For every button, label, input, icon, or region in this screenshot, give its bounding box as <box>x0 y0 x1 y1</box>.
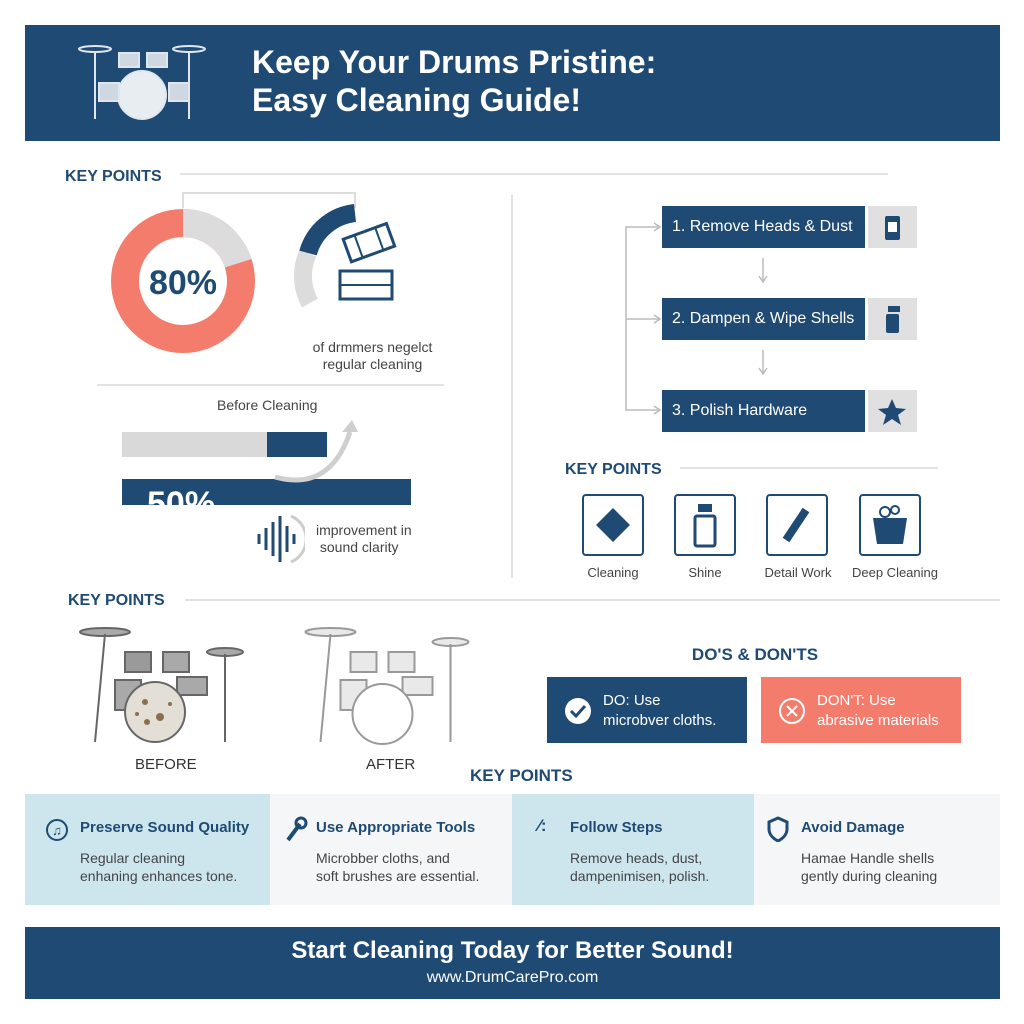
card: follow steps <box>512 794 754 905</box>
chart: donut 80% <box>111 209 255 353</box>
footer banner: www.DrumCarePro.com <box>427 969 598 986</box>
footer banner <box>25 927 1000 999</box>
chart: donut 80%: 80% <box>149 264 217 302</box>
callout: do: DO: Use <box>603 692 661 709</box>
card: follow steps: dampenimisen, polish. <box>570 868 709 884</box>
card: follow steps: ⁄: <box>538 816 546 835</box>
card: avoid damage: Avoid Damage <box>801 819 905 836</box>
chart: before/after bars: Before Cleaning <box>217 397 317 413</box>
card: tools: soft brushes are essential. <box>316 868 479 884</box>
callout: do <box>547 677 747 743</box>
step 1: 1. Remove Heads & Dust <box>672 218 853 235</box>
heading: key points 1: KEY POINTS <box>65 168 162 185</box>
text: improvement: sound clarity <box>320 539 398 555</box>
text: Detail Work <box>765 565 831 580</box>
card: avoid damage <box>754 794 1000 905</box>
card: tools <box>270 794 512 905</box>
text: improvement: improvement in <box>316 522 412 538</box>
step 1 <box>662 206 865 248</box>
text: Shine <box>688 565 722 580</box>
icon: cleaning <box>582 494 644 556</box>
title: Easy Cleaning Guide! <box>252 82 581 118</box>
footer banner: Start Cleaning Today for Better Sound! <box>291 937 734 964</box>
text: drummers neglect: of drmmers negelct <box>313 339 432 355</box>
icon: deep cleaning <box>859 494 921 556</box>
step 2 <box>662 298 865 340</box>
icon: shine <box>674 494 736 556</box>
card: avoid damage: gently during cleaning <box>801 868 937 884</box>
image: drum kit before <box>79 627 244 743</box>
card: preserve sound: Preserve Sound Quality <box>80 819 249 836</box>
heading: key points 4: KEY POINTS <box>470 766 573 785</box>
text: drummers neglect: regular cleaning <box>323 356 422 372</box>
card: follow steps: Follow Steps <box>570 819 663 836</box>
text: drummers neglect <box>313 339 432 372</box>
callout: don't <box>761 677 961 743</box>
callout: don't: abrasive materials <box>817 712 939 729</box>
chart: before/after bars <box>122 397 411 505</box>
card: preserve sound: Regular cleaning <box>80 850 185 866</box>
icon: detail work <box>766 494 828 556</box>
callout: don't: DON'T: Use <box>817 692 896 709</box>
card: preserve sound <box>25 794 270 905</box>
label: before: BEFORE <box>135 756 197 773</box>
text: Deep Cleaning <box>852 565 938 580</box>
card: preserve sound: ♫ <box>52 823 62 838</box>
heading: do's & don'ts: DO'S & DON'TS <box>692 645 818 664</box>
card: tools: Microbber cloths, and <box>316 850 450 866</box>
card: avoid damage: Hamae Handle shells <box>801 850 934 866</box>
flow connector <box>625 222 768 414</box>
title: Keep Your Drums Pristine: <box>252 44 656 80</box>
card: follow steps: Remove heads, dust, <box>570 850 702 866</box>
heading: key points 2: KEY POINTS <box>565 461 662 478</box>
chart: gauge with drums <box>294 204 396 308</box>
heading: key points 3: KEY POINTS <box>68 592 165 609</box>
step 3: 3. Polish Hardware <box>672 402 807 419</box>
label: after: AFTER <box>366 756 415 773</box>
callout: do: microbver cloths. <box>603 712 716 729</box>
header banner <box>25 25 1000 141</box>
text: improvement <box>316 522 412 555</box>
icon: sound wave <box>258 514 305 564</box>
card: preserve sound: enhaning enhances tone. <box>80 868 237 884</box>
image: drum kit after <box>304 627 470 745</box>
step 2: 2. Dampen & Wipe Shells <box>672 310 854 327</box>
step 3 <box>662 390 865 432</box>
card: tools: Use Appropriate Tools <box>316 819 475 836</box>
icon: drum kit header <box>78 45 206 120</box>
title <box>252 44 656 118</box>
text: Cleaning <box>587 565 639 580</box>
